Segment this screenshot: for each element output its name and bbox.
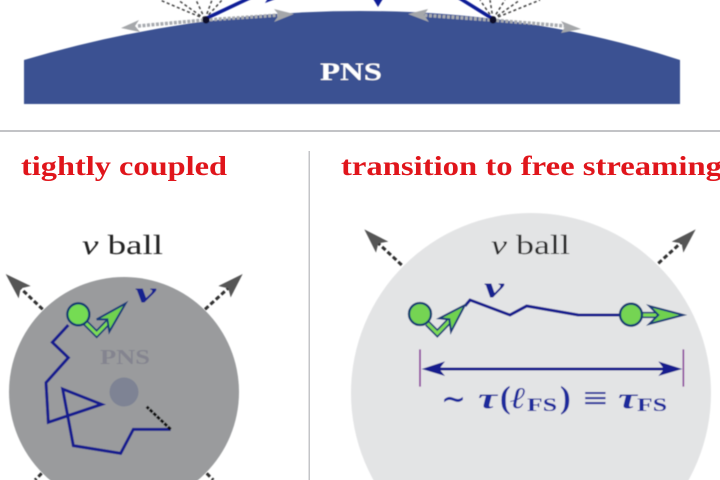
particle track <box>465 300 622 315</box>
formula: τ <box>618 382 639 415</box>
label: nu: ν <box>135 276 157 309</box>
emission points <box>202 16 497 24</box>
formula <box>441 379 667 416</box>
green particle start <box>409 303 465 333</box>
random walk <box>46 303 171 453</box>
formula: ≡ <box>583 382 608 415</box>
panel: tightly coupled ball <box>6 230 243 480</box>
panel: PNS surface diagram <box>24 0 680 104</box>
right emission fan <box>480 0 540 19</box>
heading: transition to free streaming: transition to free streaming <box>341 151 720 181</box>
label: nu: ν <box>484 271 505 304</box>
formula: ) <box>560 379 571 415</box>
PNS dome <box>24 11 680 104</box>
green particle end <box>620 304 683 326</box>
horizontal divider <box>0 130 720 132</box>
blue neutrino paths <box>205 0 493 19</box>
gray ball <box>9 277 239 480</box>
outgoing arrows <box>6 274 243 480</box>
label: nu ball: ν ball <box>82 230 163 260</box>
core <box>110 378 138 406</box>
green particle and arrow <box>67 303 126 334</box>
panel: free streaming ball <box>351 213 711 480</box>
light ball <box>351 213 711 480</box>
heading: tightly coupled: tightly coupled <box>21 151 227 181</box>
formula: ∼ <box>441 383 466 416</box>
outgoing arrows <box>364 229 696 265</box>
vertical divider <box>308 151 310 480</box>
PNS label: PNS <box>320 59 382 86</box>
free streaming span <box>420 349 683 387</box>
label: nu ball: ν ball <box>491 230 570 260</box>
left emission fan <box>160 0 222 19</box>
formula: τ <box>478 382 499 415</box>
formula: ( <box>500 379 511 415</box>
grey surface arrows <box>121 9 581 33</box>
formula: FS <box>527 395 557 416</box>
PNS label: PNS <box>100 345 150 369</box>
formula: ℓ <box>510 382 526 415</box>
formula: FS <box>637 395 667 416</box>
